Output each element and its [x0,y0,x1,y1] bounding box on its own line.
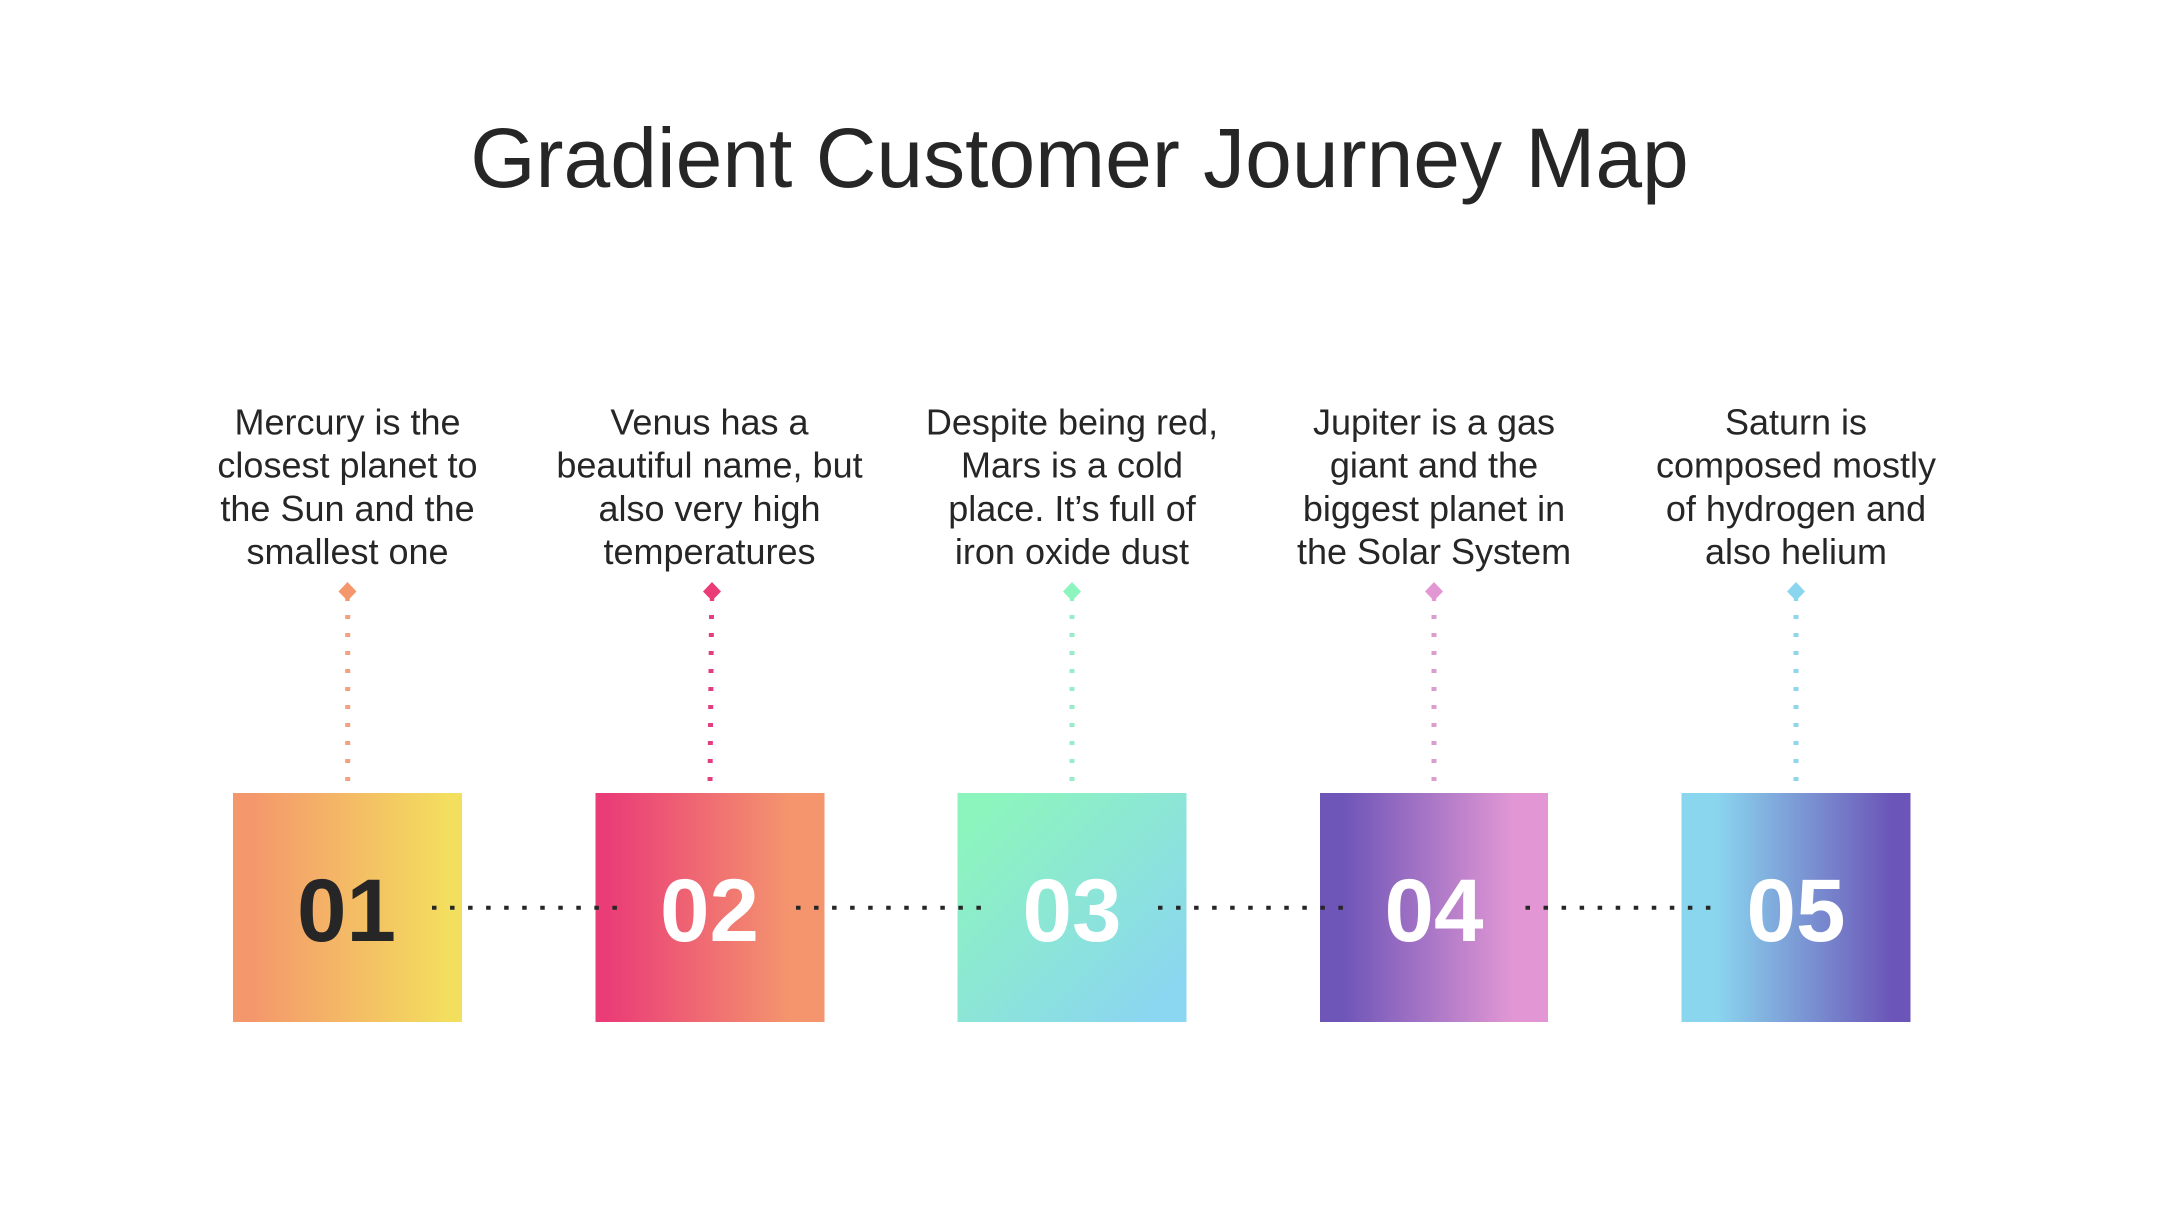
horizontal dotted connector 2 to 3 [796,906,982,910]
icon: diamond marker 2 [703,582,721,601]
number 04: 04 [1384,860,1484,960]
gradient box 1 [233,793,462,1022]
step 1: Mercury [217,402,478,1022]
text block: Saturn description: composed mostly [1656,445,1936,486]
text block: Mars description: Despite being red, [926,402,1218,442]
text block: Jupiter description: giant and the [1330,445,1538,486]
step 5: Saturn [1656,402,1936,1022]
number 03: 03 [1022,860,1122,960]
text block: Mercury description: closest planet to [217,445,478,486]
text block: Saturn description: Saturn is [1725,402,1867,442]
text block: Jupiter description: the Solar System [1297,531,1571,572]
text block: Saturn description: of hydrogen and [1666,488,1926,529]
text block: Mars description: iron oxide dust [955,531,1189,572]
text block: Mars description: place. It’s full of [948,488,1197,529]
text block: Venus description: also very high [598,488,821,529]
icon: diamond marker 5 [1787,582,1805,601]
text block: Jupiter description: Jupiter is a gas [1313,402,1555,442]
gradient box 5 [1682,793,1910,1022]
text block: Venus description: beautiful name, but [556,445,863,486]
icon: diamond marker 4 [1425,582,1443,601]
gradient box 4 [1320,793,1548,1022]
step 4: Jupiter [1297,402,1571,1022]
step 3: Mars [926,402,1218,1022]
gradient box 3 [958,793,1186,1022]
text block: Mercury description: the Sun and the [220,488,475,529]
text block: Mars description: Mars is a cold [961,445,1183,486]
horizontal dotted connector 1 to 2 [432,906,618,910]
dotted connector 4 [1432,615,1436,785]
step 2: Venus [556,402,863,1022]
horizontal dotted connector 3 to 4 [1158,906,1344,910]
icon: diamond marker 3 [1063,582,1081,601]
text block: Venus description: Venus has a [610,402,810,442]
dotted connector 2 [710,615,712,785]
text block: Saturn description: also helium [1705,531,1887,572]
title: Gradient Customer Journey Map [470,111,1689,205]
dotted connector 3 [1070,615,1074,785]
number 01: 01 [297,860,396,960]
dotted connector 5 [1794,615,1798,785]
text block: Mercury description: Mercury is the [234,402,461,442]
icon: diamond marker 1 [338,582,356,601]
text block: Jupiter description: biggest planet in [1303,488,1565,529]
number 05: 05 [1746,860,1846,960]
dotted connector 1 [345,615,350,785]
horizontal dotted connector 4 to 5 [1526,906,1712,910]
text block: Venus description: temperatures [603,531,816,572]
number 02: 02 [660,860,759,960]
gradient box 2 [596,793,824,1022]
text block: Mercury description: smallest one [246,531,449,572]
